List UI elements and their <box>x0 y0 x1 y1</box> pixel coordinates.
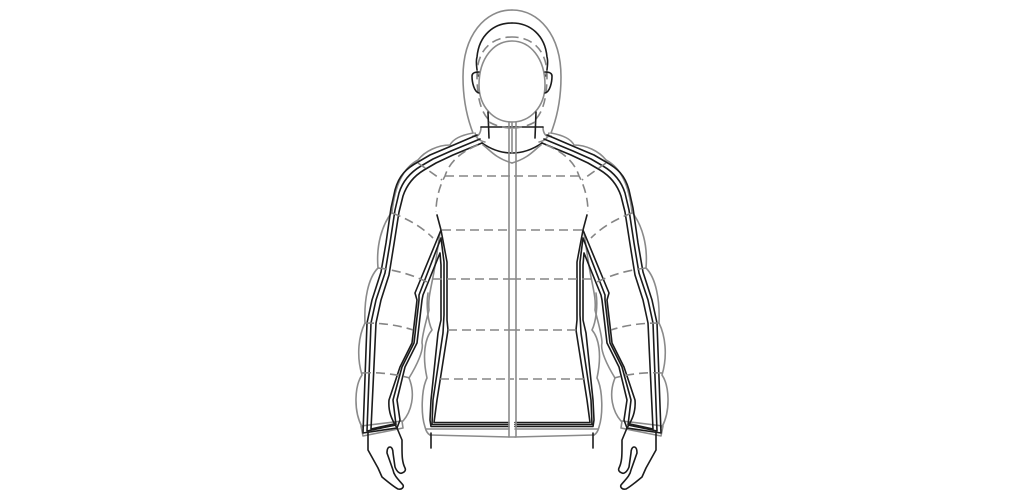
left half of jacket with hood, sleeve, cuff and hand <box>356 10 512 489</box>
right half of jacket with hood, sleeve, cuff and hand <box>512 10 668 489</box>
centre zipper <box>509 122 516 437</box>
face outline <box>479 41 545 122</box>
